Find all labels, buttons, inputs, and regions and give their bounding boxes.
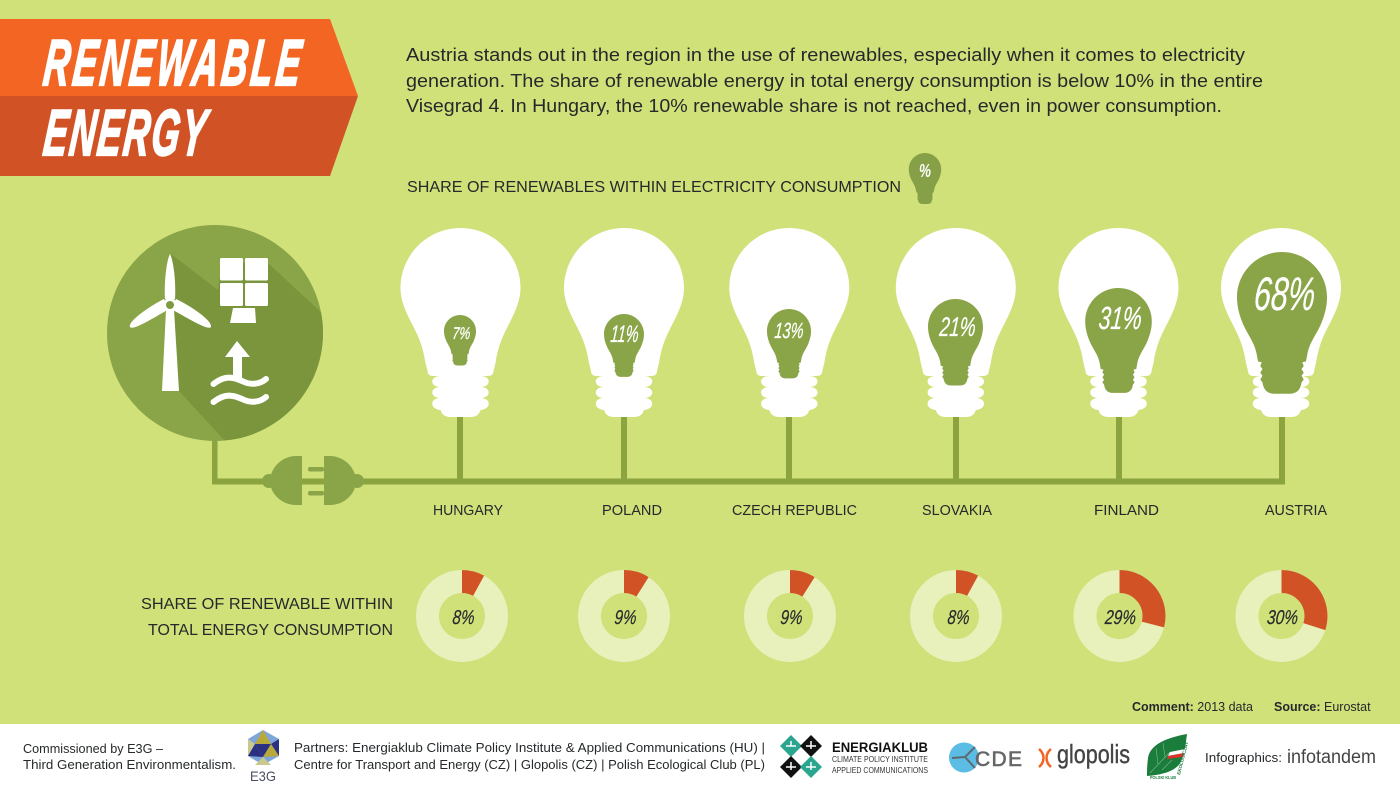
bulb: Poland: 11% — [609, 321, 640, 348]
logo: E3G: E3G — [250, 768, 276, 784]
icon: percent bulb — [909, 153, 941, 204]
intro paragraph: generation. The share of renewable energy in total energy consumption is below 10% in the entire — [406, 70, 1263, 91]
country labels — [433, 503, 1327, 519]
icon: solar panel — [220, 258, 268, 323]
donut: Austria 30% — [1247, 582, 1316, 650]
country labels: POLAND — [602, 503, 662, 519]
logo: Glopolis — [1039, 739, 1130, 769]
footer — [0, 724, 1400, 788]
data comment and source — [1132, 700, 1371, 714]
donut: Finland 29%: 29% — [1103, 607, 1137, 629]
data comment and source: Comment: 2013 data — [1132, 700, 1253, 714]
data comment and source: Source: Eurostat — [1274, 700, 1371, 714]
icon: wind turbine — [130, 254, 211, 391]
logo: E3G — [248, 730, 279, 784]
total consumption label: TOTAL ENERGY CONSUMPTION — [148, 622, 393, 639]
icon: percent bulb: % — [919, 161, 931, 181]
logo: Energiaklub — [780, 735, 928, 778]
commissioned text: Commissioned by E3G – — [23, 742, 163, 756]
logo: CDE — [949, 742, 1022, 772]
country labels: FINLAND — [1094, 503, 1159, 519]
logo: Energiaklub: CLIMATE POLICY INSTITUTE — [832, 755, 928, 764]
donut: Poland 9% — [590, 582, 658, 650]
title banner: ENERGY — [40, 97, 213, 170]
country labels: CZECH REPUBLIC — [732, 503, 857, 519]
intro paragraph — [406, 44, 1263, 116]
logo: Energiaklub: APPLIED COMMUNICATIONS — [832, 766, 928, 775]
bulb: Austria — [1221, 228, 1341, 417]
bulb: Finland — [1058, 228, 1178, 417]
country labels: HUNGARY — [433, 503, 503, 519]
donut: Hungary 8% — [428, 582, 496, 650]
donut: Slovakia 8%: 8% — [947, 607, 970, 629]
bulb: Austria: 68% — [1252, 267, 1318, 320]
bulb: Czech Republic: 13% — [774, 318, 805, 343]
icon: hydro waves — [214, 341, 266, 402]
donut: Finland 29% — [1085, 582, 1154, 650]
commissioned text: Third Generation Environmentalism. — [23, 758, 236, 772]
bulb: Finland: 31% — [1097, 300, 1144, 336]
donut: Czech Republic 9%: 9% — [780, 607, 803, 629]
electricity heading: SHARE OF RENEWABLES WITHIN ELECTRICITY CONSUMPTION — [407, 179, 901, 196]
donut: Czech Republic 9% — [756, 582, 824, 650]
total consumption label — [141, 596, 393, 639]
title banner: RENEWABLE — [40, 27, 308, 100]
bulb: Slovakia: 21% — [938, 312, 977, 342]
intro paragraph: Austria stands out in the region in the use of renewables, especially when it comes to electricity — [406, 44, 1246, 65]
title banner — [0, 19, 358, 176]
logo: Polish Ecological Club leaf — [1147, 734, 1189, 780]
bulb: Slovakia — [896, 228, 1016, 417]
country labels: AUSTRIA — [1265, 503, 1327, 519]
renewable energy circle — [107, 225, 330, 450]
logo: CDE: CDE — [975, 748, 1022, 771]
logo: Polish Ecological Club leaf: EKOLOGICZNY — [1176, 741, 1189, 775]
bulb: Hungary: 7% — [452, 324, 471, 343]
donut: Poland 9%: 9% — [614, 607, 637, 629]
total consumption label: SHARE OF RENEWABLE WITHIN — [141, 596, 393, 613]
logo: Polish Ecological Club leaf: POLSKI KLUB — [1150, 775, 1177, 780]
intro paragraph: Visegrad 4. In Hungary, the 10% renewable share is not reached, even in power consumption. — [406, 95, 1222, 116]
infographics credit: Infographics: — [1205, 751, 1282, 765]
infographics credit: infotandem — [1287, 747, 1376, 768]
icon: plug — [262, 456, 364, 505]
partners text: Partners: Energiaklub Climate Policy Institute & Applied Communications (HU) | — [294, 741, 765, 755]
connector wires — [212, 360, 1285, 484]
country labels: SLOVAKIA — [922, 503, 992, 519]
bulb: Hungary — [400, 228, 520, 417]
infographics credit — [1205, 747, 1376, 768]
bulb: Poland — [564, 228, 684, 417]
donut: Hungary 8%: 8% — [452, 607, 475, 629]
partners text — [294, 741, 765, 772]
commissioned text — [23, 742, 236, 772]
donut: Slovakia 8% — [922, 582, 990, 650]
partners text: Centre for Transport and Energy (CZ) | Glopolis (CZ) | Polish Ecological Club (PL) — [294, 758, 765, 772]
donut: Austria 30%: 30% — [1266, 607, 1299, 629]
bulb: Czech Republic — [729, 228, 849, 417]
logo: Glopolis: glopolis — [1057, 739, 1130, 769]
logo: Energiaklub: ENERGIAKLUB — [832, 740, 928, 755]
